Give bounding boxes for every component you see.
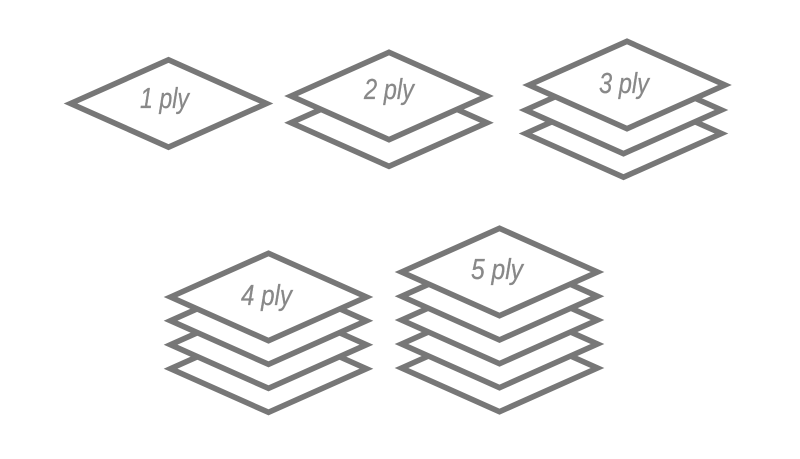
label: 3 ply: 3 ply: [599, 68, 650, 100]
label: 1 ply: 1 ply: [140, 83, 190, 115]
label: 2 ply: 2 ply: [363, 74, 415, 106]
stack: 2 ply: [291, 52, 487, 166]
label: 4 ply: 4 ply: [241, 280, 293, 312]
label: 5 ply: 5 ply: [471, 254, 524, 286]
stack: 5 ply: [402, 228, 597, 412]
stack: 3 ply: [526, 41, 725, 177]
stack: 4 ply: [171, 253, 366, 412]
sheet: [71, 60, 266, 147]
stack: 1 ply: [71, 60, 266, 147]
